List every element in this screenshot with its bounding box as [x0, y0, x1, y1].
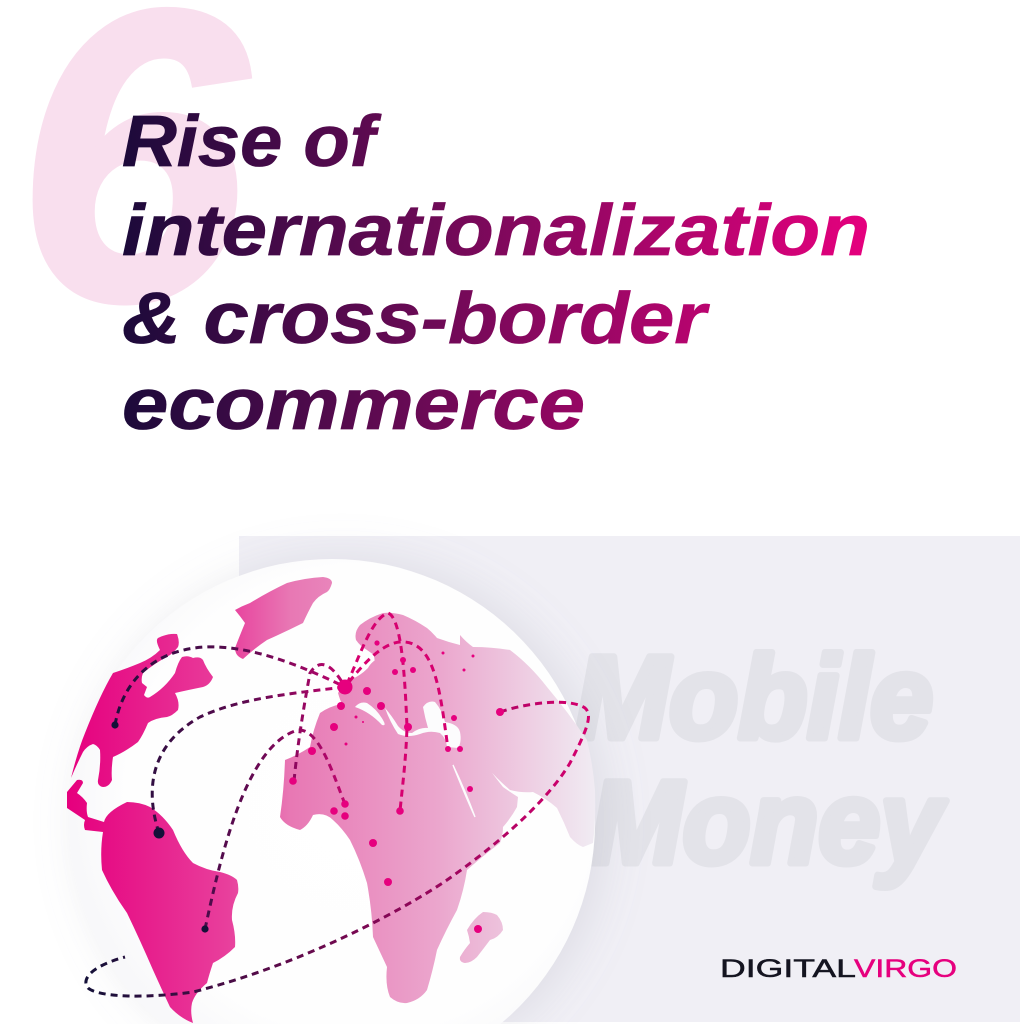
Mediterranean west — [355, 702, 385, 725]
route: Colombia — [152, 687, 345, 833]
inland seas — [355, 702, 475, 817]
Red Sea — [453, 765, 475, 817]
route: West Africa — [294, 665, 345, 781]
flight routes from Americas — [115, 647, 345, 929]
flight loop around the globe — [86, 702, 589, 996]
logo: Digital Virgo: VIRGO — [854, 955, 957, 983]
title: ecommerce — [122, 365, 585, 445]
route: hub to Middle East — [349, 642, 448, 749]
logo: Digital Virgo — [720, 955, 957, 983]
South and Central America — [67, 780, 238, 1023]
Afro-Eurasia — [280, 613, 595, 1003]
logo: Digital Virgo: DIGITAL — [720, 955, 856, 983]
city markers — [289, 640, 504, 933]
flight routes across Europe — [347, 613, 448, 811]
Madagascar — [460, 912, 503, 963]
globe — [67, 559, 595, 1024]
title: Rise of — [122, 102, 381, 182]
hub marker — [338, 680, 352, 694]
panel: grey backdrop — [239, 536, 1020, 1022]
title: & cross-border — [122, 279, 710, 359]
globe disc — [69, 559, 595, 1024]
North America — [71, 634, 213, 787]
origin markers — [111, 721, 209, 933]
Greenland — [235, 577, 332, 659]
title — [122, 102, 870, 445]
watermark text: Mobile Money: Money — [590, 757, 947, 889]
continents — [67, 577, 595, 1023]
route: North America — [115, 647, 345, 725]
title: internationalization — [122, 191, 870, 271]
watermark text: Mobile Money — [575, 632, 947, 889]
route: Brazil — [205, 730, 345, 929]
route: hub to Central Africa — [347, 613, 407, 811]
watermark text: Mobile Money: Mobile — [575, 632, 933, 764]
Mediterranean east and Black Sea — [385, 702, 461, 748]
